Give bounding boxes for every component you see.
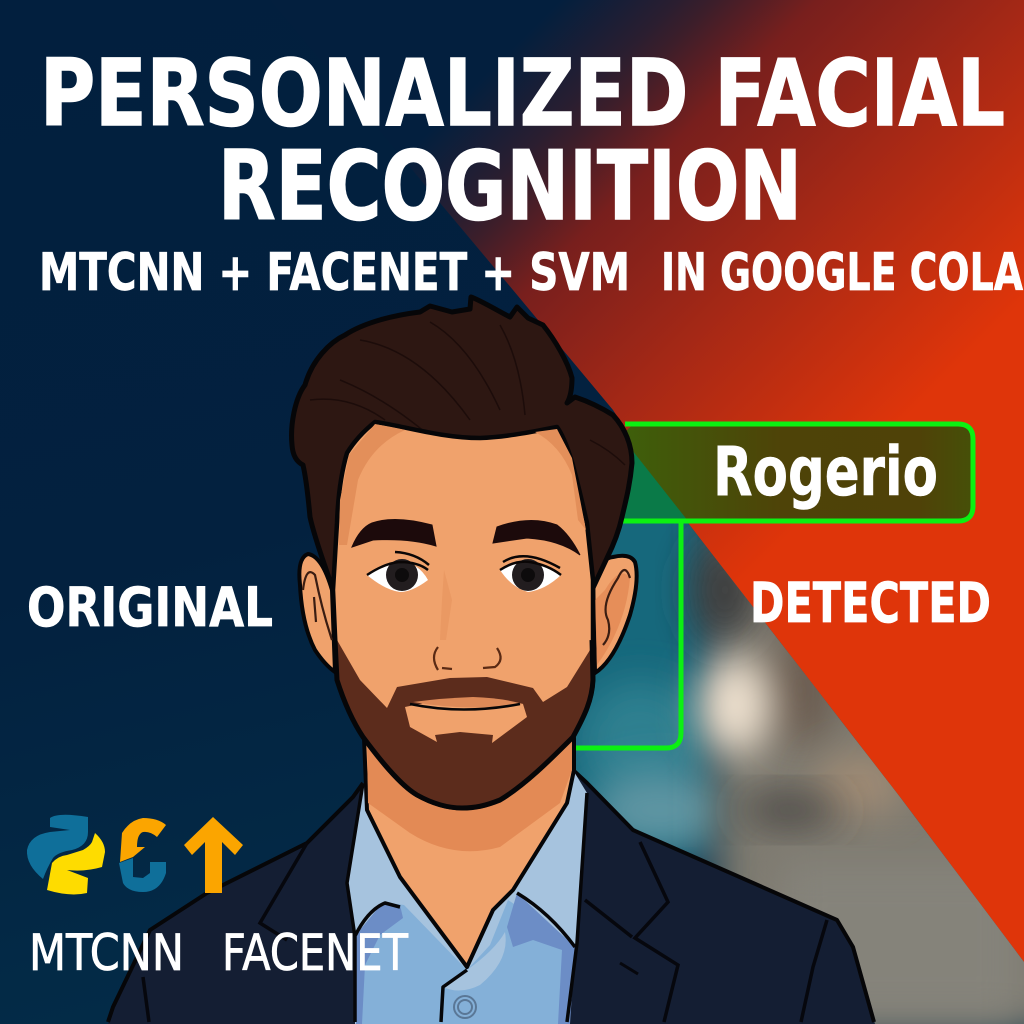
eyebrows: [352, 519, 580, 555]
title: [40, 40, 1005, 242]
beard: [337, 640, 593, 808]
icon: colab-style C: [119, 818, 166, 892]
shirt button: [454, 996, 476, 1018]
jacket: [108, 770, 875, 1024]
ears: [299, 554, 637, 673]
portrait: cartoon man: [108, 297, 875, 1024]
hair: [292, 297, 632, 600]
left eye: [367, 552, 429, 592]
detection box outline: [560, 521, 681, 748]
right eye: [500, 556, 561, 592]
caption: MTCNN: MTCNN: [29, 924, 184, 982]
icon: python logo: [27, 815, 105, 894]
face: [333, 422, 593, 808]
lips and mouth: [410, 697, 523, 710]
subtitle: MTCNN + FACENET + SVM: [39, 243, 630, 303]
hair strands: [310, 322, 625, 465]
label: original: ORIGINAL: [27, 576, 273, 639]
nose: [434, 647, 501, 670]
blurred photo wedge behind the portrait: [576, 524, 1024, 1024]
icon: orange arrow: [184, 817, 243, 893]
shirt: [347, 770, 587, 1024]
jaw outline: [335, 640, 593, 808]
caption: FACENET: FACENET: [222, 924, 408, 982]
name label: Rogerio: [620, 424, 973, 521]
neck: [364, 738, 574, 967]
title: RECOGNITION: [218, 132, 802, 242]
name label: Rogerio: Rogerio: [713, 433, 938, 512]
